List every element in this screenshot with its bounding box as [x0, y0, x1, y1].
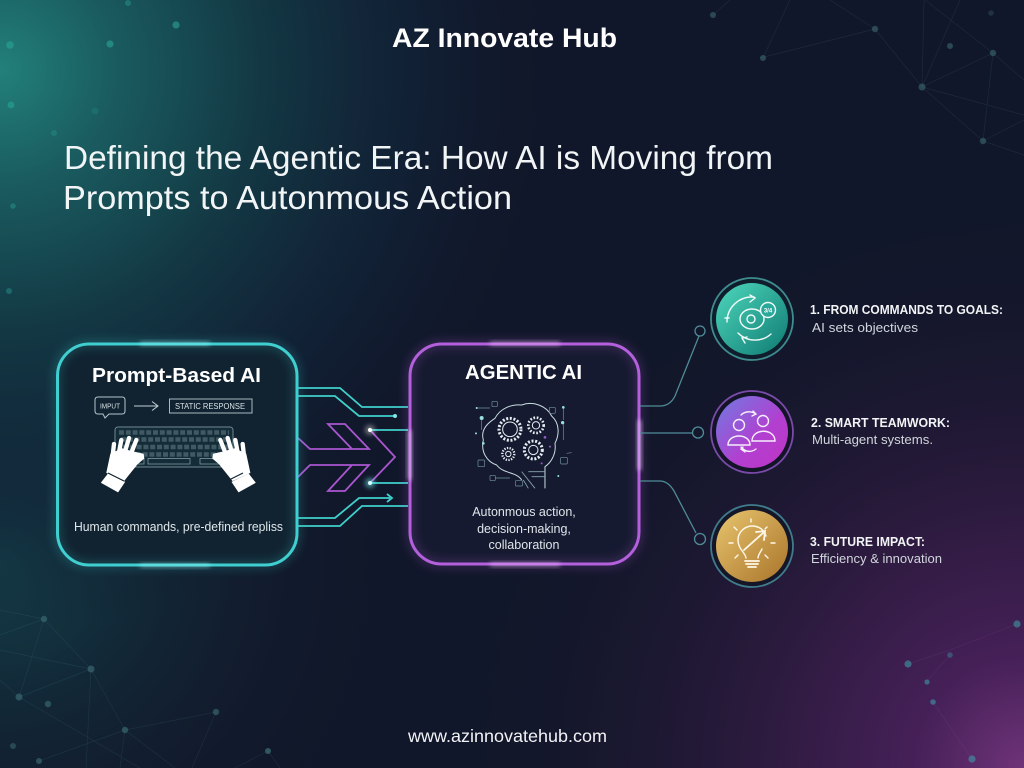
network decoration: top right	[710, 0, 1024, 155]
item 2: smart teamwork	[711, 391, 950, 473]
item 3: future impact	[711, 505, 942, 587]
icon: two people	[711, 391, 793, 473]
icon: brain cycle	[711, 278, 793, 360]
item 2: smart teamwork: Multi-agent systems.	[812, 433, 933, 447]
wire nodes	[365, 414, 397, 488]
network decoration: bottom left	[0, 610, 280, 768]
item text: 1. FROM COMMANDS TO GOALS:	[810, 303, 1003, 317]
panel caption: Human commands, pre-defined repliss	[74, 520, 283, 534]
left hand	[101, 438, 144, 492]
panel: Prompt-Based AI	[57, 342, 297, 567]
panel: Agentic AI	[408, 342, 641, 566]
item 3: future impact: Efficiency & innovation	[811, 552, 942, 566]
icon: keyboard	[115, 427, 233, 467]
title	[63, 139, 773, 216]
item text: 2. SMART TEAMWORK:	[811, 416, 950, 430]
header brand: AZ Innovate Hub	[392, 23, 617, 53]
panel heading: Prompt-Based AI	[92, 364, 261, 387]
input bubble	[95, 397, 125, 418]
icon: brain cycle: 3/4	[764, 308, 773, 314]
circuit details	[477, 401, 572, 486]
gears	[499, 418, 544, 460]
item text: 3. FUTURE IMPACT:	[810, 535, 925, 549]
title: Prompts to Autonmous Action	[63, 179, 512, 216]
item 1: from commands to goals: AI sets objectives	[812, 321, 918, 335]
connector wires between panels	[297, 388, 408, 526]
title: Defining the Agentic Era: How AI is Moving from	[64, 139, 773, 176]
network decoration: bottom right	[904, 620, 1021, 763]
icon: hands	[101, 438, 255, 492]
arrow	[134, 402, 158, 410]
connector lines to list	[640, 326, 706, 544]
icon: light bulb	[711, 505, 793, 587]
item 1: from commands to goals	[711, 278, 1003, 360]
right hand	[213, 438, 255, 492]
teal circuit wires	[297, 388, 408, 526]
icon: brain with gears	[475, 401, 572, 488]
panel caption: Autonmous action,	[472, 505, 576, 519]
panel caption: decision-making,	[477, 522, 571, 536]
panel caption: collaboration	[489, 538, 559, 552]
static response box	[170, 399, 252, 413]
static response box: STATIC RESPONSE	[175, 402, 245, 411]
purple chevron arrows	[298, 424, 395, 491]
footer url: www.azinnovatehub.com	[407, 726, 607, 746]
panel heading: AGENTIC AI	[465, 362, 582, 384]
panel caption	[472, 505, 576, 552]
network decoration: top left	[6, 0, 180, 294]
input bubble: IMPUT	[100, 404, 121, 410]
